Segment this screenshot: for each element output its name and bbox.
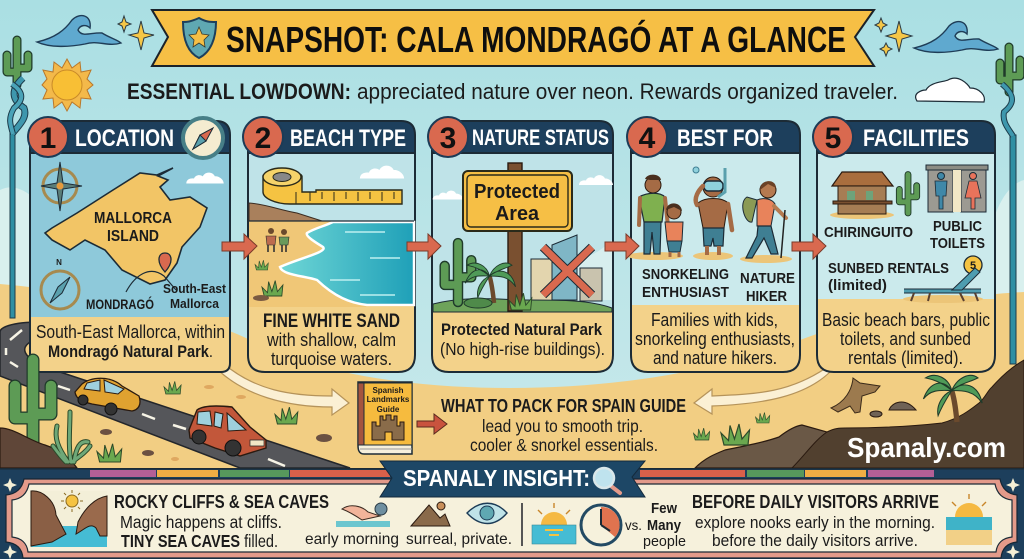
panel 4 text: snorkeling enthusiasts,	[635, 329, 795, 349]
comparison labels	[625, 500, 686, 550]
icon: sun lounger	[903, 268, 983, 303]
insight left heading and text: ROCKY CLIFFS & SEA CAVES	[114, 492, 329, 512]
arrow: panel 4 to 5	[792, 234, 826, 259]
title text: SNAPSHOT: CALA MONDRAGÓ AT A GLANCE	[226, 18, 846, 60]
insight right heading and text: explore nooks early in the morning.	[695, 513, 935, 532]
arrow: panel 1 to 2	[222, 234, 257, 259]
illustration: red car	[189, 406, 266, 456]
map label island: MALLORCA	[94, 210, 172, 227]
icon: grass tuft and rock	[253, 260, 283, 301]
illustration: hiker	[740, 181, 792, 263]
icon: protected area sign: Protected	[474, 181, 560, 203]
arrow: guide to packing list	[417, 414, 447, 434]
left foreground cactus and rock	[0, 360, 90, 468]
top right cactus with teal pole	[1000, 47, 1020, 364]
label snorkeling enthusiast	[642, 266, 729, 301]
swimmer labels: early morning	[305, 531, 399, 548]
insight right heading and text	[692, 492, 939, 550]
panel 1 text: South-East Mallorca, within	[36, 322, 225, 342]
map label island	[94, 210, 172, 245]
icon: rating badge 5: 5	[970, 260, 976, 272]
label nature hiker: NATURE	[740, 270, 795, 287]
icon: clock	[581, 505, 621, 545]
insight left heading and text: TINY SEA CAVES filled.	[121, 531, 278, 551]
insight banner	[380, 461, 645, 497]
icon: eye	[467, 503, 507, 524]
top left cactus with teal pole	[7, 40, 28, 318]
banner text: SPANALY INSIGHT:	[403, 465, 590, 491]
icon: guide book	[358, 382, 412, 454]
label public toilets	[930, 218, 985, 252]
illustration: public toilets	[926, 165, 988, 212]
icon: cactus	[899, 175, 917, 213]
panel 3 text: Protected Natural Park	[441, 320, 602, 339]
icon: compass rose	[41, 162, 82, 211]
icon: shield	[183, 18, 216, 58]
packing guide text: lead you to smooth trip.	[482, 416, 643, 436]
panel 2 text: FINE WHITE SAND	[263, 311, 400, 332]
road	[0, 322, 350, 468]
icon: cloud top right	[916, 78, 984, 102]
icon: cloud	[360, 166, 404, 178]
cream arrow from panel 5 to guide	[694, 368, 830, 414]
panel 1 text: Mondragó Natural Park.	[48, 342, 213, 361]
panel 5 text: Basic beach bars, public	[822, 310, 990, 330]
illustration: small rocks	[870, 402, 916, 417]
panel 4 text: Families with kids,	[651, 310, 778, 330]
swimmer labels: surreal, private.	[406, 531, 512, 548]
icon: measuring tape	[263, 168, 402, 204]
panel 5 text: rentals (limited).	[848, 348, 963, 368]
comparison labels: vs.	[625, 517, 642, 533]
number 3	[428, 117, 468, 157]
insight frame	[6, 479, 1017, 558]
book title: Guide	[377, 405, 400, 414]
icon: swimmer	[336, 503, 390, 527]
illustration: yellow car	[75, 378, 140, 415]
insight right heading and text: before the daily visitors arrive.	[712, 531, 918, 550]
icon: small compass: N	[56, 258, 62, 267]
map label island: ISLAND	[107, 228, 159, 245]
icon: mountains	[411, 502, 450, 526]
icon: cloud	[186, 173, 224, 184]
color strip	[90, 470, 934, 477]
panel 1: location	[28, 117, 230, 372]
illustration: snorkeler	[693, 167, 733, 260]
arrow: panel 3 to 4	[605, 234, 639, 259]
icon: small compass	[41, 258, 79, 309]
illustration: chiringuito	[830, 172, 894, 219]
panel 5 text: toilets, and sunbed	[840, 329, 971, 349]
icon: palm	[923, 375, 982, 422]
packing guide text	[441, 396, 686, 455]
icon: sunrise	[532, 503, 576, 544]
panel 2 text: with shallow, calm	[266, 330, 396, 350]
panel 5 text	[822, 310, 990, 368]
subtitle: essential lowdown: ESSENTIAL LOWDOWN:	[127, 79, 351, 104]
icon: cactus	[445, 243, 471, 302]
panel: spanaly insight	[0, 461, 1024, 559]
label snorkeling enthusiast: ENTHUSIAST	[642, 284, 729, 301]
subtitle: essential lowdown: appreciated nature over neon. Rewards organized traveler.	[357, 79, 898, 104]
panel 3 text	[440, 320, 605, 359]
number 2: 2	[255, 122, 271, 155]
label sunbed rentals: SUNBED RENTALS	[828, 260, 949, 277]
book title	[367, 386, 410, 414]
icon: sparkles right	[875, 18, 912, 56]
map label south-east	[163, 281, 227, 311]
insight right heading and text: BEFORE DAILY VISITORS ARRIVE	[692, 492, 939, 512]
heading beach type: BEACH TYPE	[290, 125, 406, 152]
label nature hiker	[740, 270, 795, 305]
heading location: LOCATION	[75, 125, 174, 152]
swimmer labels	[305, 531, 512, 548]
label public toilets: PUBLIC	[933, 218, 982, 235]
label snorkeling enthusiast: SNORKELING	[642, 266, 729, 283]
panel 2 text	[263, 311, 400, 369]
number 5	[813, 117, 853, 157]
cream arrow from panel 1 to guide	[218, 364, 349, 415]
insight inner panel	[12, 484, 1012, 552]
illustration: family	[627, 175, 683, 260]
number 1	[28, 117, 68, 157]
number 4: 4	[639, 122, 656, 155]
comparison labels: people	[643, 533, 686, 550]
number 1: 1	[40, 122, 56, 155]
icon: protected area sign	[463, 171, 572, 231]
icon: sign post	[508, 163, 522, 311]
heading nature status: NATURE STATUS	[472, 125, 609, 150]
icon: magnifier	[594, 468, 620, 493]
insight left heading and text: Magic happens at cliffs.	[120, 512, 282, 532]
number 3: 3	[440, 122, 456, 155]
map label south-east: South-East	[163, 281, 227, 296]
icon: protected area sign: Area	[495, 203, 540, 225]
number 4	[627, 117, 667, 157]
icon: beach sunset	[946, 494, 992, 545]
grass tufts	[694, 412, 770, 445]
panel 3: nature status	[428, 117, 613, 372]
illustration: cliffs and caves	[31, 490, 107, 547]
desert details	[97, 381, 332, 462]
icon: compass	[183, 118, 223, 158]
label sunbed rentals: (limited)	[828, 277, 887, 294]
map label mondrago: MONDRAGÓ	[86, 297, 154, 312]
arrow: panel 2 to 3	[407, 234, 441, 259]
icon: map pin	[159, 253, 171, 272]
icon: high-rise buildings crossed out	[531, 235, 602, 301]
icon: clouds	[433, 175, 613, 300]
label chiringuito: CHIRINGUITO	[824, 224, 913, 241]
label public toilets: TOILETS	[930, 235, 985, 252]
icon: castle	[372, 415, 404, 440]
heading facilities: FACILITIES	[863, 125, 969, 152]
panel 4: best for	[627, 117, 800, 372]
ground	[433, 299, 612, 312]
comparison labels: Many	[647, 517, 682, 534]
icon: palm	[465, 263, 516, 303]
illustration: brown lizard rock	[831, 378, 880, 413]
website label: Spanaly.com	[847, 432, 1006, 463]
beach scene	[249, 203, 414, 307]
right rocks	[695, 360, 1024, 468]
panel 5: facilities	[813, 117, 995, 372]
people on beach	[266, 228, 289, 252]
panel 1 text	[36, 322, 225, 361]
number 5: 5	[825, 122, 841, 155]
label sunbed rentals	[828, 260, 949, 294]
heading best for: BEST FOR	[677, 125, 773, 152]
panel 4 text	[635, 310, 795, 368]
icon: wave right	[914, 22, 998, 52]
panel 3 text: (No high-rise buildings).	[440, 339, 605, 359]
subtitle: essential lowdown	[127, 79, 898, 104]
icon: corner stars	[3, 478, 1020, 559]
map: Mallorca island	[45, 168, 207, 284]
insight left heading and text	[114, 492, 329, 551]
book title: Landmarks	[367, 395, 410, 404]
panel 2 text: turquoise waters.	[271, 349, 392, 369]
packing guide text: cooler & snorkel essentials.	[470, 435, 658, 455]
icon: wave left	[37, 16, 121, 46]
icon: rating badge 5	[964, 256, 982, 274]
icon: plants	[464, 293, 532, 310]
panel 2: beach type	[243, 117, 415, 372]
panel 4 text: and nature hikers.	[653, 348, 777, 368]
icon: sparkles left	[118, 16, 154, 50]
map callout line	[126, 271, 176, 292]
label nature hiker: HIKER	[746, 288, 787, 305]
book title: Spanish	[372, 386, 404, 395]
title banner	[152, 10, 874, 66]
icon: sun	[42, 59, 93, 111]
map label south-east: Mallorca	[170, 296, 220, 311]
packing guide text: WHAT TO PACK FOR SPAIN GUIDE	[441, 396, 686, 416]
comparison labels: Few	[651, 500, 677, 517]
number 2	[243, 117, 283, 157]
